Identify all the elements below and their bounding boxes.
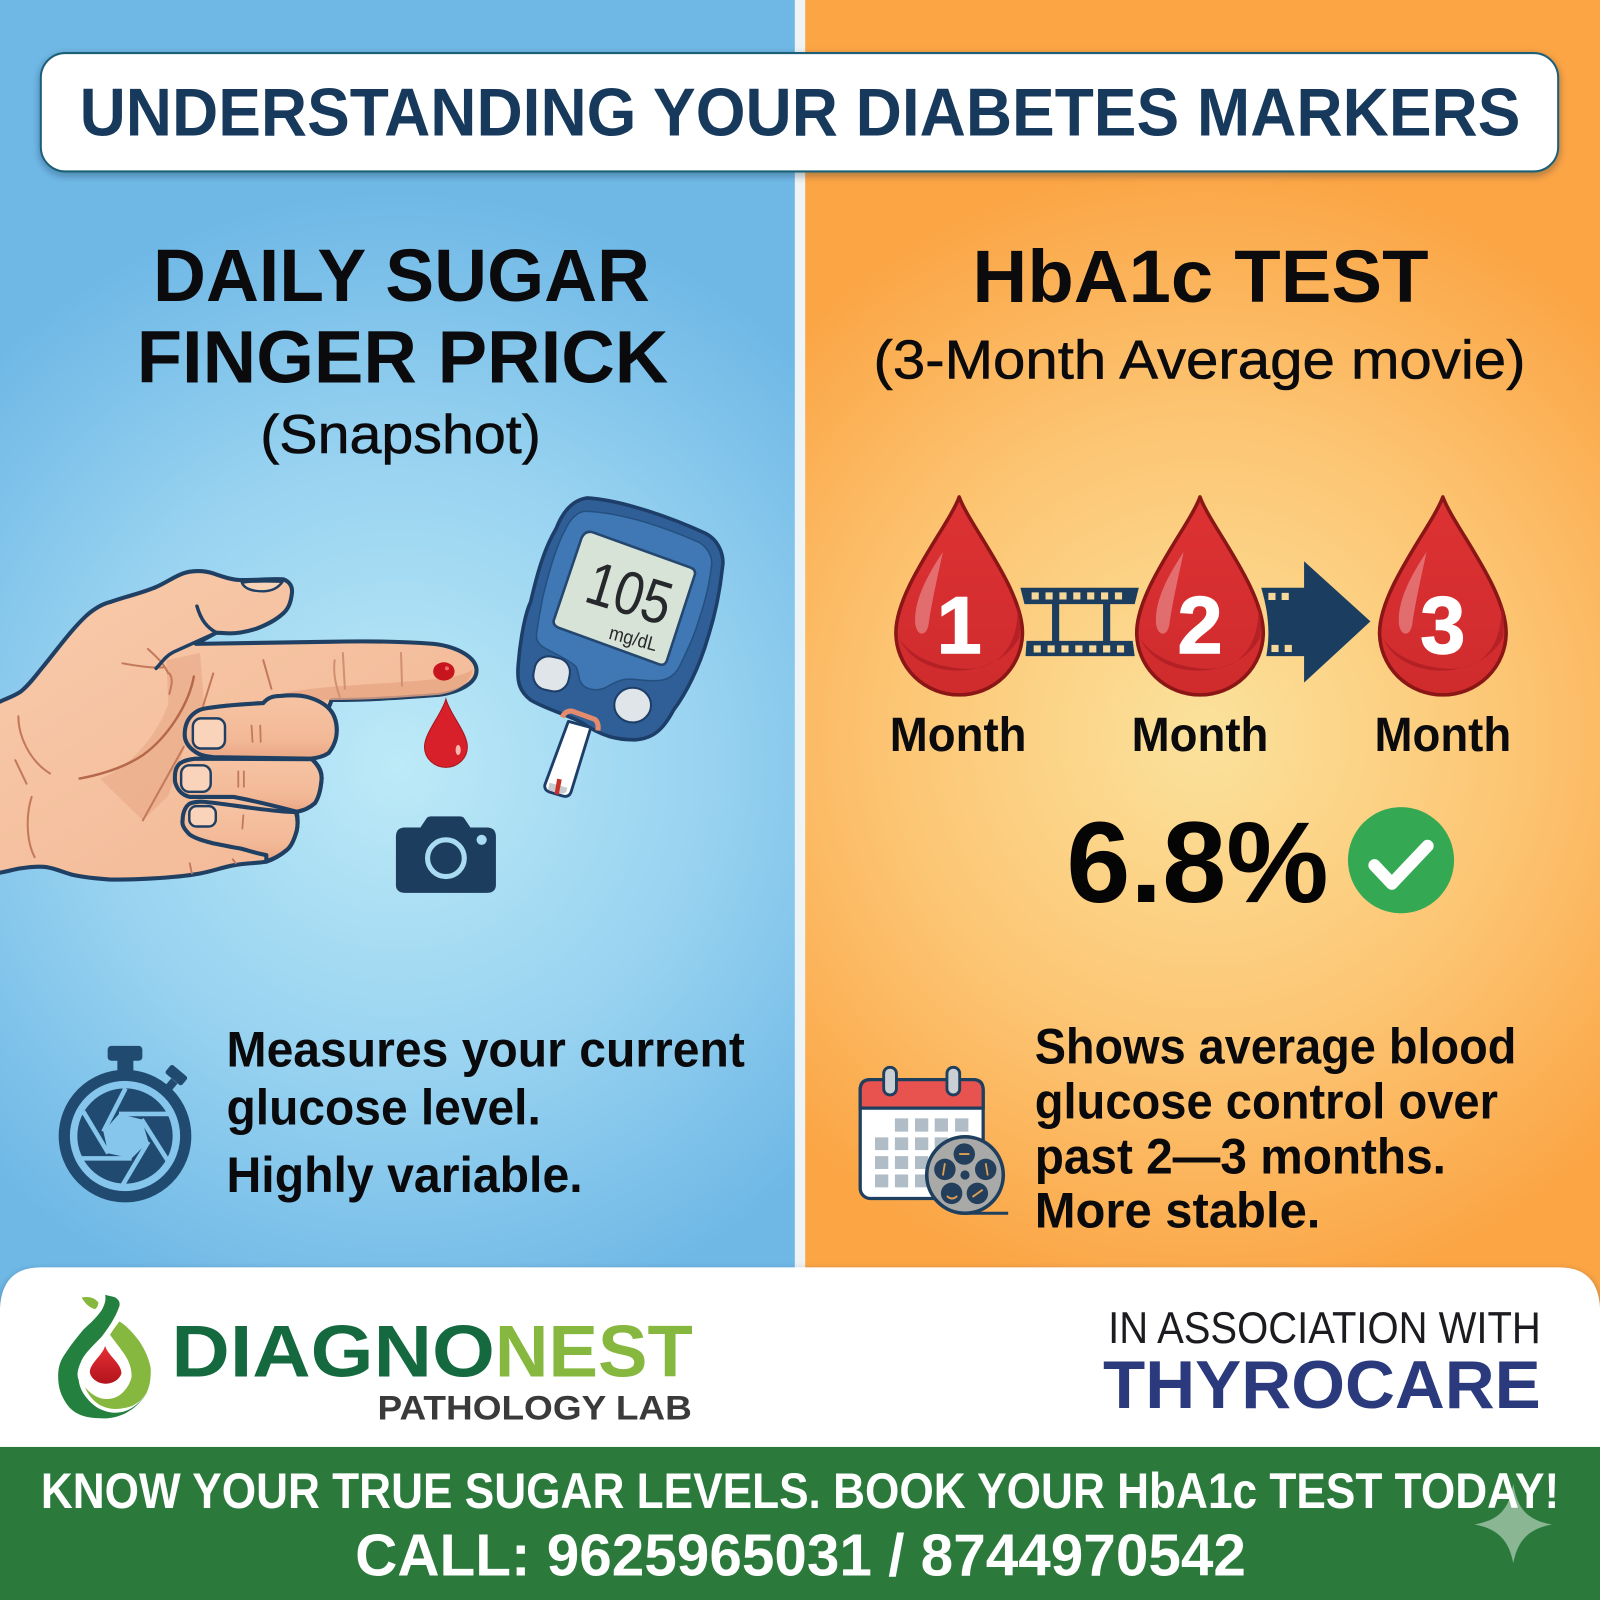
index finger shadow — [267, 669, 472, 700]
film strip connector — [1020, 588, 1139, 656]
palm creases — [80, 677, 194, 779]
title banner — [41, 53, 1558, 171]
result value: 6.8% — [1066, 799, 1329, 927]
sparkle watermark — [1474, 1484, 1552, 1563]
text: snapshot description — [227, 1021, 745, 1203]
finger 2 — [175, 759, 322, 812]
text: hba1c description: More stable. — [1035, 1183, 1320, 1239]
heading: daily sugar finger prick: FINGER PRICK — [137, 316, 669, 399]
text: hba1c description — [1035, 1018, 1516, 1239]
film reel — [927, 1137, 1003, 1213]
illustration: hand pointing — [0, 571, 477, 880]
icon: green check — [1348, 807, 1454, 913]
month labels: Month — [890, 709, 1027, 762]
centre divider — [795, 0, 805, 1327]
heading: daily sugar finger prick: DAILY SUGAR — [153, 234, 650, 317]
icon: glucose meter: mg/dL — [607, 622, 660, 656]
heading: hba1c test — [873, 235, 1526, 391]
meter screen — [554, 532, 695, 665]
title banner: UNDERSTANDING YOUR DIABETES MARKERS — [80, 76, 1520, 151]
drop 1 — [896, 497, 1022, 695]
association text — [1103, 1302, 1541, 1423]
left panel background — [0, 0, 795, 1327]
test strip — [562, 711, 598, 731]
palm shading — [100, 653, 204, 820]
text: hba1c description: glucose control over — [1035, 1073, 1498, 1129]
icon: calendar with film reel — [860, 1067, 1008, 1213]
logo wordmark — [171, 1310, 693, 1427]
drop 2: 2 — [1178, 581, 1222, 671]
heading: daily sugar finger prick: (Snapshot) — [260, 403, 541, 465]
logo wordmark: NEST — [495, 1310, 693, 1393]
footer call-to-action band — [0, 1447, 1600, 1600]
icon: blood drop — [424, 699, 467, 767]
finger 1 — [185, 695, 337, 759]
month labels: Month — [1374, 709, 1511, 762]
drop 1: 1 — [937, 581, 982, 671]
association text: IN ASSOCIATION WITH — [1108, 1302, 1541, 1353]
icon: glucose meter: 105 — [579, 548, 680, 638]
right panel background — [805, 0, 1600, 1327]
arrow with film holes — [1261, 561, 1370, 683]
icon: camera — [396, 816, 496, 893]
thumb nail — [242, 581, 283, 591]
logo wordmark: PATHOLOGY LAB — [378, 1389, 692, 1427]
icon: stopwatch with shutter — [64, 1046, 188, 1197]
association text: THYROCARE — [1103, 1348, 1541, 1423]
text: snapshot description: glucose level. — [227, 1079, 541, 1135]
month labels: Month — [1132, 709, 1268, 762]
icon: glucose meter — [518, 498, 723, 796]
finger 3 — [182, 802, 298, 861]
text: hba1c description: Shows average blood — [1035, 1018, 1516, 1074]
drop 3 — [1380, 497, 1506, 695]
logo wordmark: DIAGNO — [171, 1310, 495, 1393]
heading: daily sugar finger prick — [137, 234, 669, 465]
prick point — [433, 662, 455, 681]
text: snapshot description: Highly variable. — [227, 1147, 583, 1203]
meter buttons — [531, 654, 573, 694]
footer white panel — [0, 1267, 1600, 1454]
text: snapshot description: Measures your current — [227, 1021, 745, 1077]
footer call-to-action band: CALL: 9625965031 / 8744970542 — [355, 1522, 1246, 1589]
drop 2 — [1137, 497, 1263, 695]
text: hba1c description: past 2—3 months. — [1035, 1128, 1446, 1184]
heading: hba1c test: HbA1c TEST — [972, 235, 1429, 318]
logo icon: diagnonest — [58, 1295, 151, 1418]
heading: hba1c test: (3-Month Average movie) — [873, 329, 1526, 391]
month labels — [890, 709, 1511, 762]
thumb web and crease — [156, 606, 216, 668]
drop 3: 3 — [1420, 581, 1465, 671]
